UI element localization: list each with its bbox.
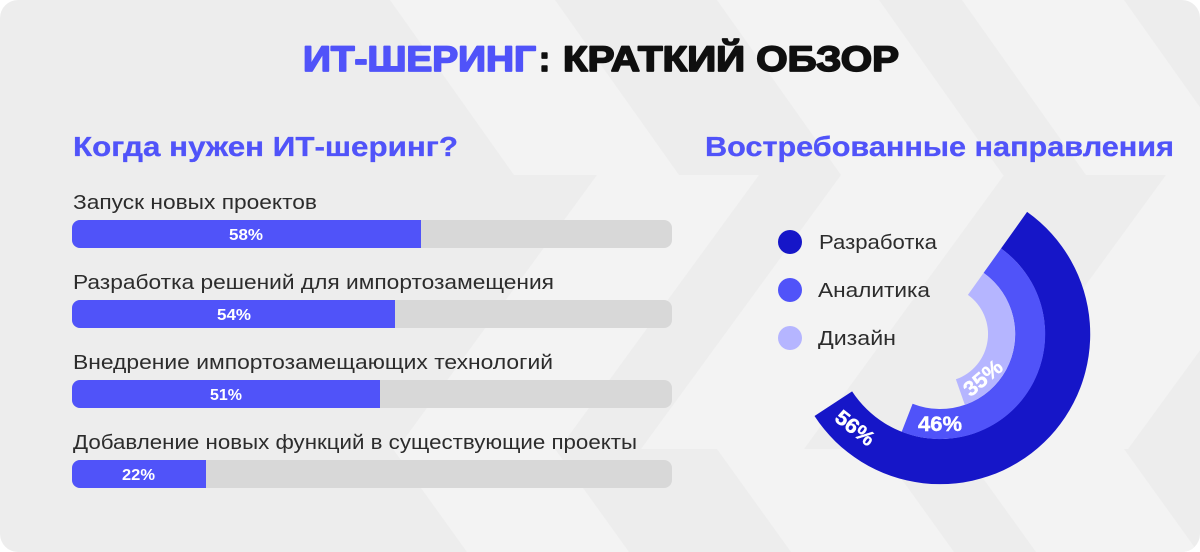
bar row: new functions 22%: Добавление новых функций в существующие проекты: [73, 431, 637, 454]
title: [303, 39, 899, 79]
bar row: new functions 22%: [72, 431, 672, 488]
value: 56%: 56%: [830, 406, 879, 451]
bar row: new projects 58%: Запуск новых проектов: [73, 191, 317, 214]
title: :: [539, 40, 550, 79]
heading: when needed: Когда нужен ИТ-шеринг?: [73, 131, 458, 162]
ring: analytics 46%: [902, 248, 1045, 439]
legend: [778, 230, 938, 350]
value: 35%: 35%: [959, 355, 1008, 401]
bar row: new projects 58%: 58%: [229, 227, 263, 244]
ring: development 56%: [814, 212, 1090, 484]
bar row: import substitution solutions 54%: Разработка решений для импортозамещения: [73, 271, 554, 294]
legend: Разработка: [819, 231, 938, 254]
bar row: import substitution technologies 51%: 51%: [210, 387, 242, 404]
title: КРАТКИЙ ОБЗОР: [563, 39, 899, 79]
legend: Дизайн: [818, 327, 896, 350]
bar row: new functions 22%: 22%: [122, 467, 155, 484]
bar row: import substitution solutions 54%: 54%: [217, 307, 251, 324]
bar row: import substitution technologies 51%: Внедрение импортозамещающих технологий: [73, 351, 553, 374]
value: 46%: 46%: [918, 413, 962, 436]
panel: when IT sharing is needed: [72, 131, 672, 488]
radial chart: [814, 212, 1090, 484]
bar row: new projects 58%: [72, 191, 672, 248]
bar row: import substitution solutions 54%: [72, 271, 672, 328]
panel: in-demand directions: [705, 131, 1174, 484]
title: ИТ-ШЕРИНГ: [303, 40, 536, 79]
legend: Аналитика: [818, 279, 931, 302]
bar row: import substitution technologies 51%: [72, 351, 672, 408]
heading: in-demand directions: Востребованные направления: [705, 131, 1174, 162]
ring: design 35%: [956, 273, 1015, 405]
